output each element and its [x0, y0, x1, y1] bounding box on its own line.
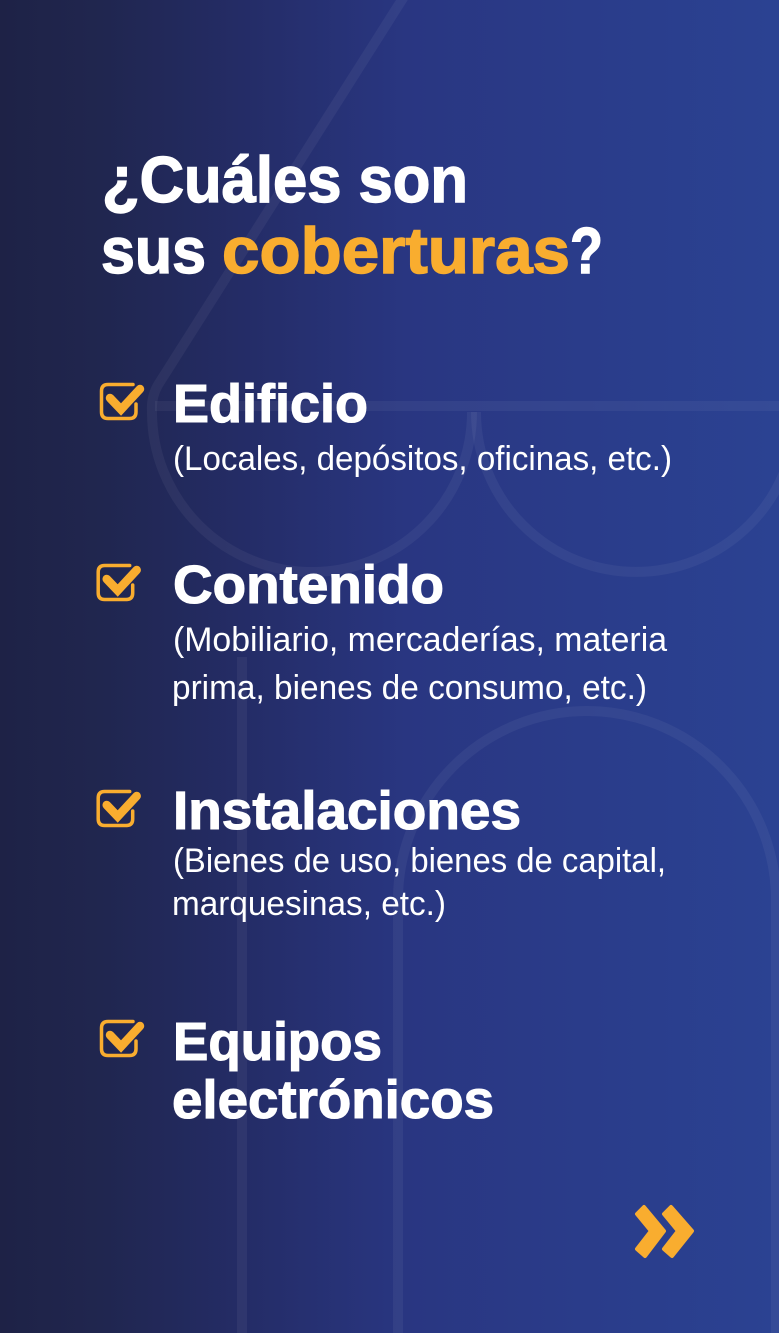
title: coberturas — [222, 214, 570, 287]
item: Edificio: Edificio — [173, 374, 368, 434]
item: Contenido: (Mobiliario, mercaderías, materia — [173, 621, 667, 659]
item: Equipos electrónicos — [172, 1012, 494, 1130]
icon: checkbox Instalaciones — [98, 792, 137, 826]
icon: double chevron arrow — [637, 1207, 692, 1256]
title: ? — [570, 214, 603, 287]
icon: checkbox Contenido — [98, 566, 137, 600]
title: sus — [101, 214, 206, 287]
item: Equipos electrónicos: Equipos — [173, 1012, 382, 1072]
icon: checkbox Equipos electrónicos — [102, 1022, 140, 1056]
title: ¿Cuáles son — [102, 143, 468, 216]
item: Edificio: (Locales, depósitos, oficinas, etc.) — [173, 440, 672, 478]
item: Contenido — [172, 555, 667, 707]
item: Instalaciones: Instalaciones — [173, 781, 521, 841]
item: Contenido: Contenido — [173, 555, 444, 615]
icon: checkbox Edificio — [102, 384, 140, 418]
item: Contenido: prima, bienes de consumo, etc.) — [172, 669, 647, 707]
item: Instalaciones — [172, 781, 666, 923]
item: Instalaciones: marquesinas, etc.) — [172, 885, 446, 923]
item: Equipos electrónicos: electrónicos — [172, 1070, 494, 1130]
item: Edificio — [173, 374, 672, 478]
title — [101, 143, 603, 287]
item: Instalaciones: (Bienes de uso, bienes de capital, — [173, 842, 666, 880]
